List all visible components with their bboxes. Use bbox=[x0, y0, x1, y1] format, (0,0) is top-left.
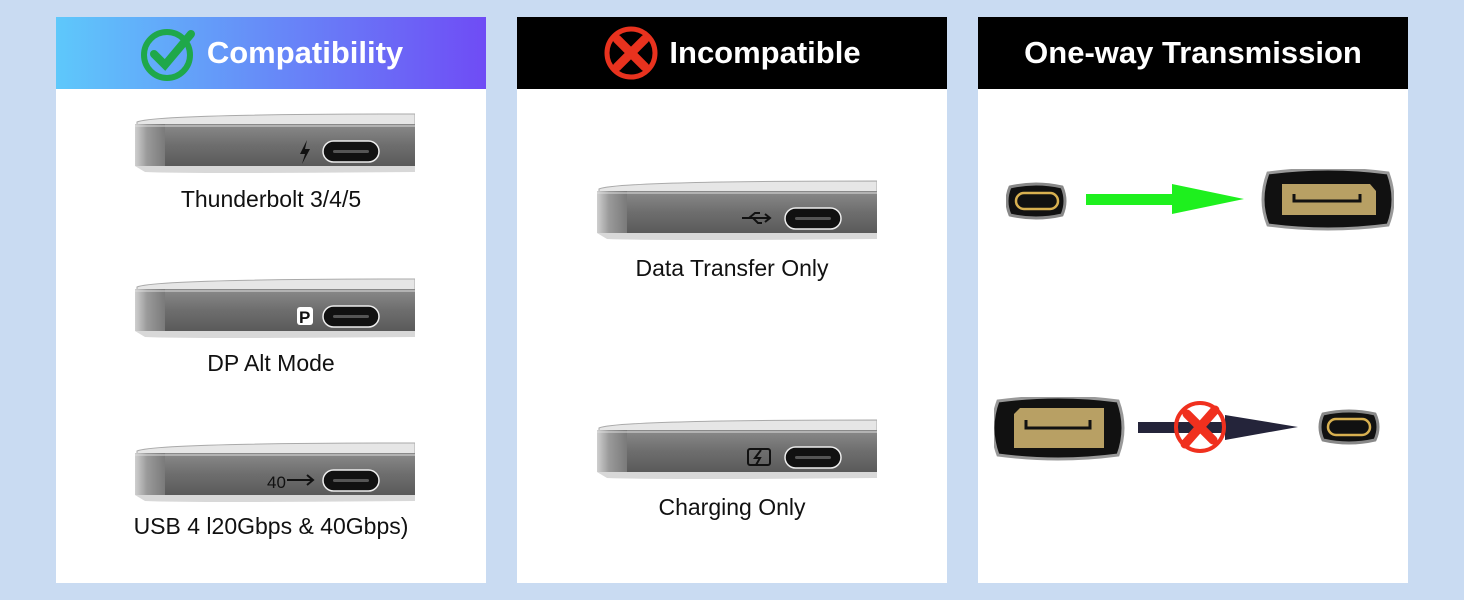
laptop: thunderbolt bbox=[135, 114, 415, 173]
panel: incompatible bbox=[517, 17, 947, 583]
diagram: dp to usb-c blocked bbox=[994, 397, 1380, 460]
laptop: data transfer bbox=[597, 180, 877, 240]
label: data transfer: Data Transfer Only bbox=[635, 255, 829, 281]
laptop: usb4 bbox=[135, 442, 415, 502]
label: charging: Charging Only bbox=[658, 494, 806, 520]
panel: one-way transmission bbox=[978, 17, 1408, 583]
laptop: dp alt: P bbox=[299, 308, 310, 327]
panel: compatibility bbox=[56, 17, 486, 583]
label: usb4: USB 4 l20Gbps & 40Gbps) bbox=[134, 513, 408, 539]
label: dp alt: DP Alt Mode bbox=[207, 350, 335, 376]
header: compatibility: Compatibility bbox=[207, 35, 403, 70]
header: incompatible bbox=[517, 17, 947, 89]
laptop: dp alt bbox=[135, 278, 415, 338]
header: one-way: One-way Transmission bbox=[1024, 35, 1362, 70]
laptop: usb4: 40 bbox=[267, 473, 286, 492]
header: incompatible: Incompatible bbox=[669, 35, 861, 70]
laptop: charging bbox=[597, 420, 877, 479]
label: thunderbolt: Thunderbolt 3/4/5 bbox=[181, 186, 361, 212]
header: one-way bbox=[978, 17, 1408, 89]
diagram: usb-c to dp allowed bbox=[1006, 169, 1394, 230]
header: compatibility bbox=[56, 17, 486, 89]
